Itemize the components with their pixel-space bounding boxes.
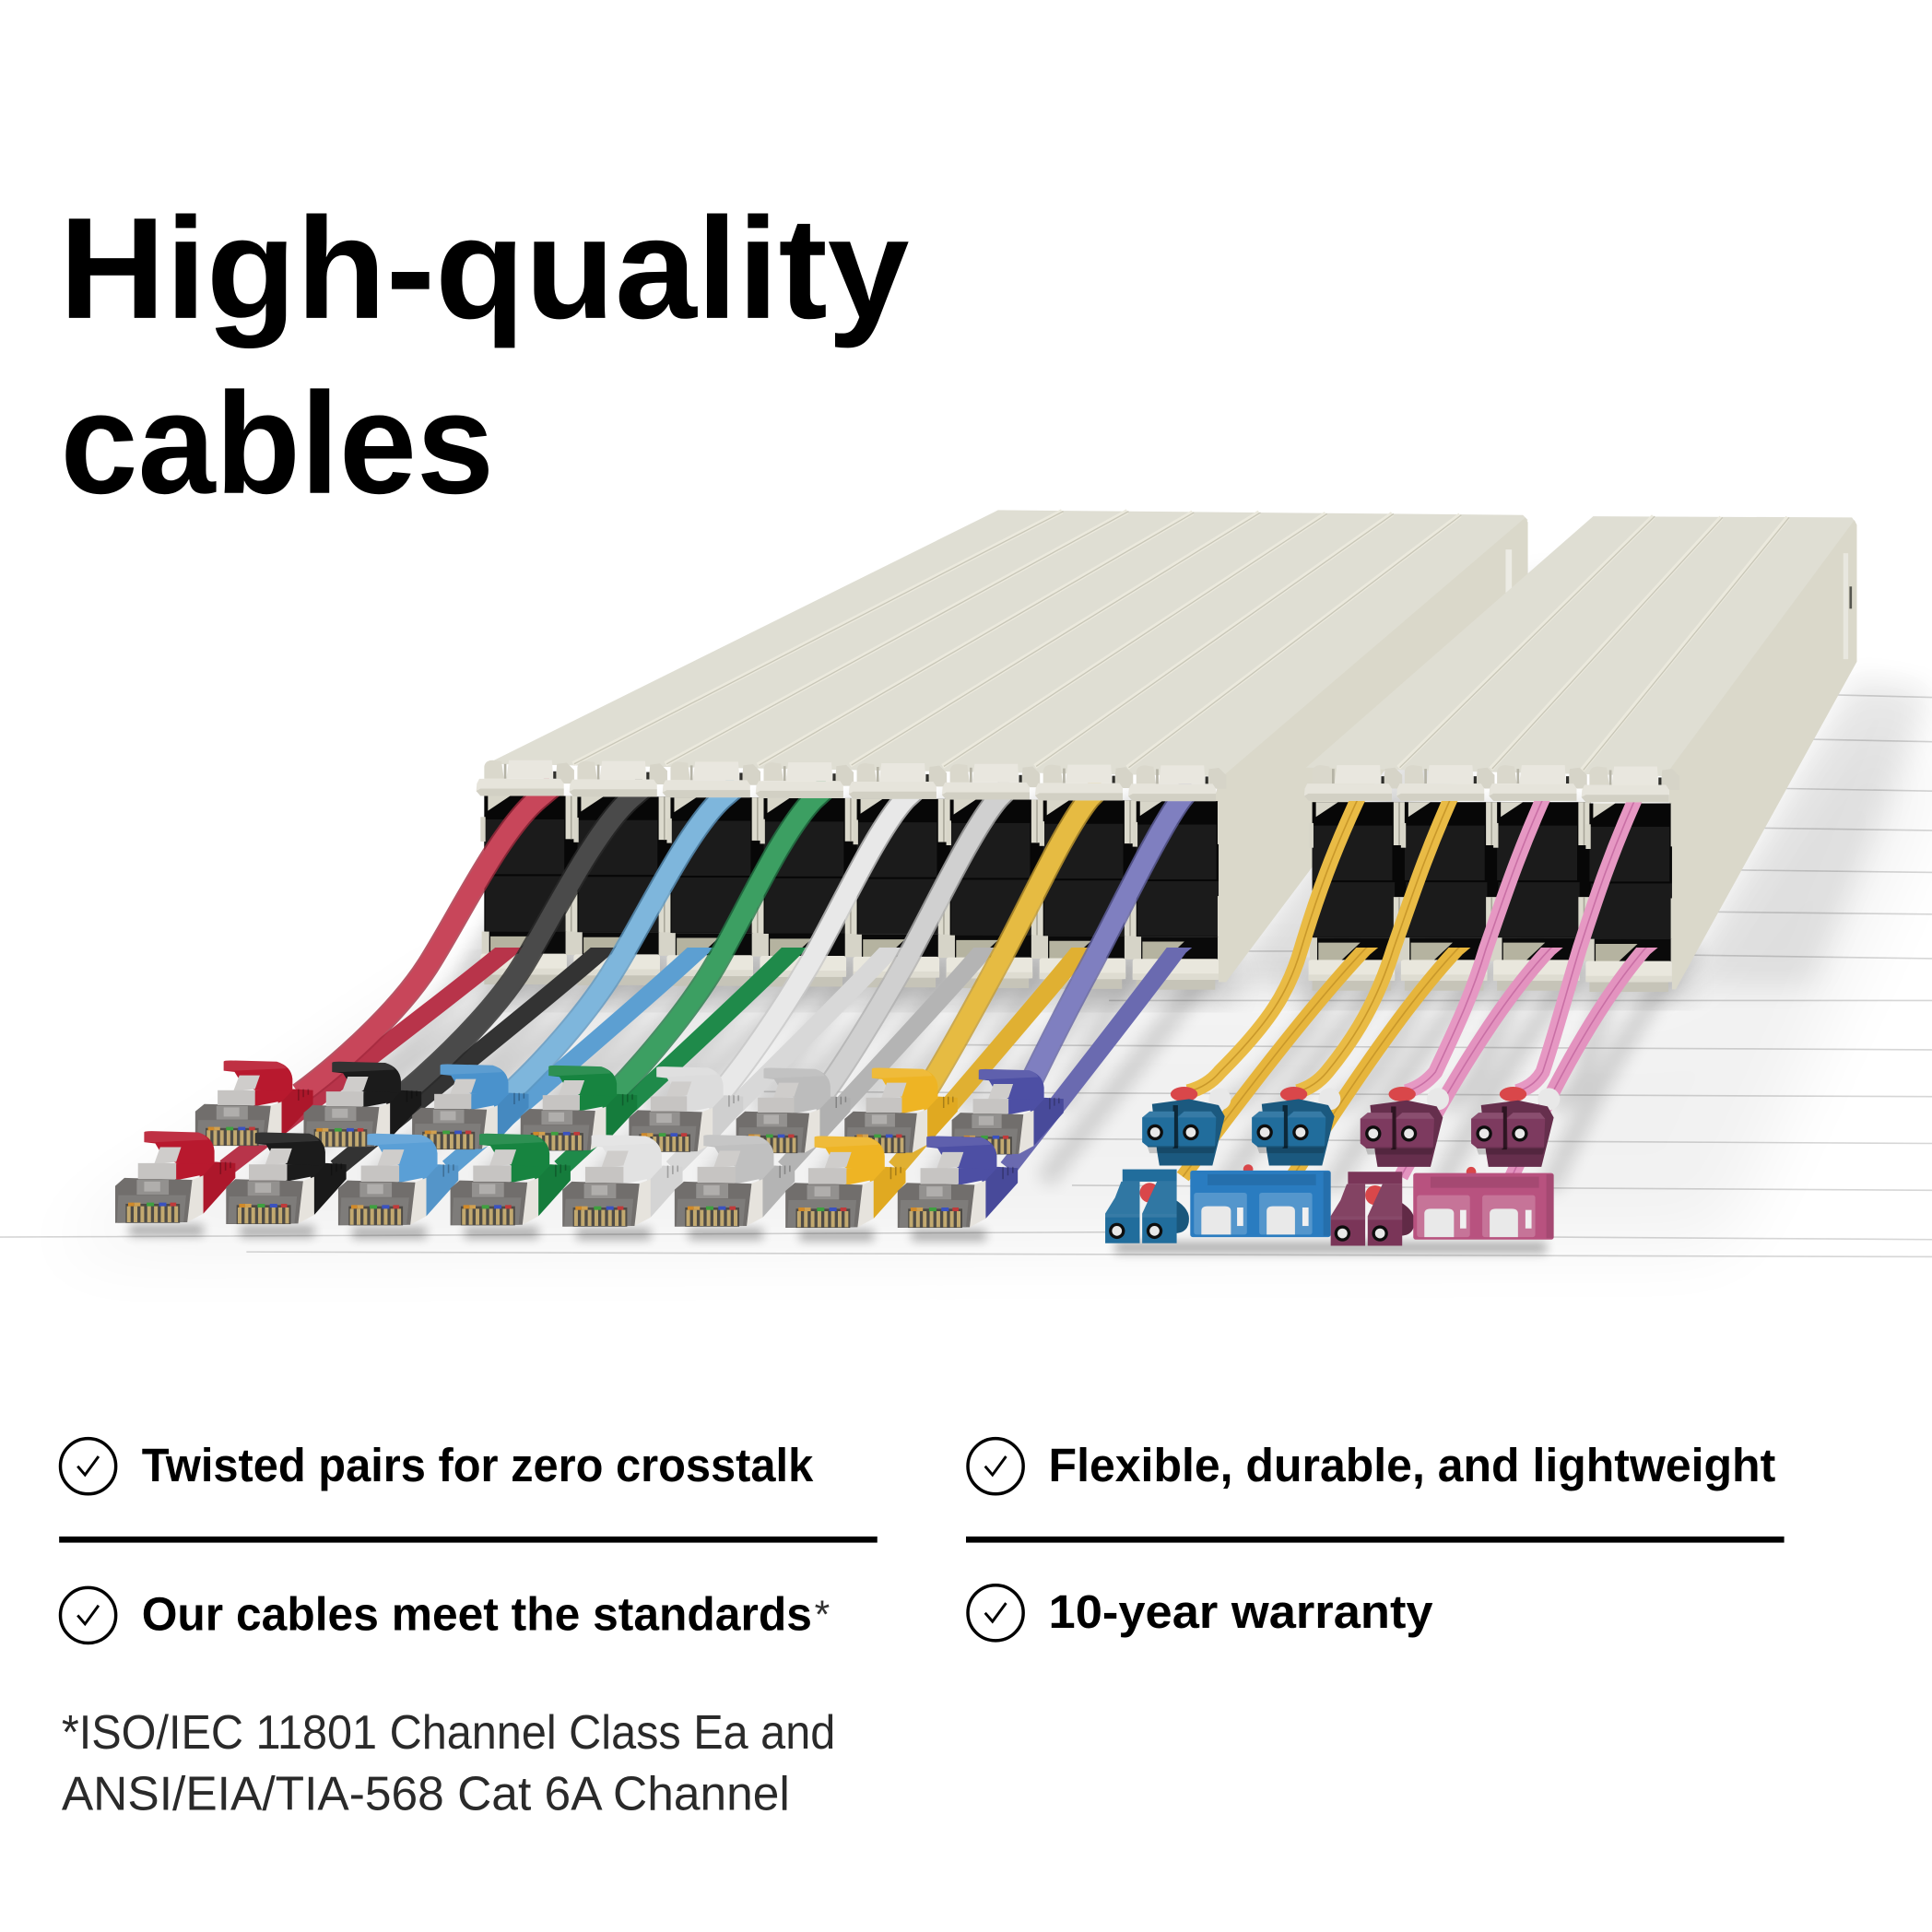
- benefit: flexible: Flexible, durable, and lightweight: [1049, 1439, 1775, 1491]
- footnote: *ISO/IEC 11801 Channel Class Ea and: [62, 1706, 835, 1760]
- top surface of ducts: [1306, 516, 1855, 776]
- fibre boots: [1171, 1087, 1560, 1110]
- right cable duct bank: [1306, 516, 1856, 992]
- right side of duct: [1668, 520, 1856, 989]
- LC and SC connectors: bottom row: [1105, 1164, 1554, 1245]
- divider left: [59, 1537, 878, 1543]
- icon: check circle: [968, 1585, 1023, 1641]
- RJ45 connectors: back row: [195, 1060, 1064, 1154]
- benefit: twisted pairs: Twisted pairs for zero crosstalk: [142, 1439, 814, 1491]
- module fronts: [480, 796, 1230, 990]
- icon: check circle: [968, 1439, 1023, 1494]
- cable shadows on floor: [263, 797, 1697, 1189]
- title: High-quality: [59, 188, 910, 349]
- end wall of left bank: [1219, 801, 1234, 982]
- top clips of modules: [477, 760, 1679, 802]
- left cable duct bank: [480, 510, 1528, 990]
- benefit: warranty: 10-year warranty: [1049, 1585, 1433, 1638]
- floor shading: [49, 579, 1932, 1251]
- benefit: standards: Our cables meet the standards: [142, 1588, 812, 1641]
- footnote: ANSI/EIA/TIA-568 Cat 6A Channel: [62, 1768, 790, 1821]
- upper flat patch cables: [300, 785, 1193, 1094]
- upper fibres: [1188, 789, 1640, 1091]
- connector shadows: [129, 1225, 1547, 1253]
- title: [59, 188, 910, 524]
- title: cables: [61, 363, 494, 524]
- end wall of right bank: [1672, 804, 1687, 989]
- fibre duplex cables: [1183, 789, 1660, 1177]
- top surface of ducts: [487, 510, 1528, 776]
- floor lines: [0, 695, 1932, 1256]
- lower fibres: [1183, 937, 1660, 1177]
- LC duplex connectors: top row: [1142, 1099, 1554, 1167]
- cable faces: [300, 785, 1193, 1094]
- RJ45 connectors: front row: [115, 1131, 1018, 1228]
- icon: check circle: [61, 1587, 116, 1643]
- cable edges: [300, 785, 1193, 1094]
- icon: check circle: [61, 1439, 116, 1494]
- upper fibre centre seams: [1188, 789, 1640, 1091]
- module fronts: [1309, 802, 1683, 992]
- footnote: [62, 1706, 835, 1821]
- lower flat patch cables: [226, 934, 1194, 1168]
- right side of duct: [1214, 517, 1528, 982]
- benefit: standards: *: [815, 1593, 830, 1637]
- divider right: [966, 1537, 1785, 1543]
